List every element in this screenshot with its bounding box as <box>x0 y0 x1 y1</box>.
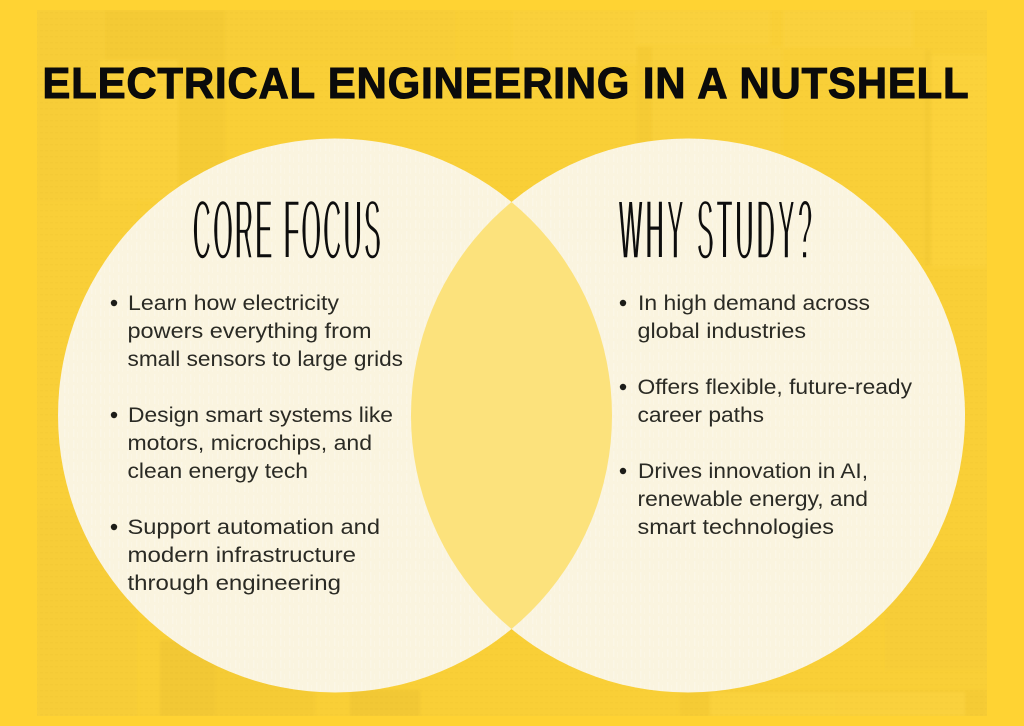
bullet: innovation: Drives innovation in AI, <box>638 459 868 483</box>
bullet: electricity: powers everything from <box>128 319 372 343</box>
headings <box>193 183 812 278</box>
heading: why study: WHY STUDY? <box>619 183 812 278</box>
bullet: electricity <box>111 291 403 371</box>
bullet: automation: through engineering <box>128 571 341 595</box>
title: ELECTRICAL ENGINEERING IN A NUTSHELL <box>42 60 970 108</box>
bullet: automation <box>111 515 380 595</box>
list: core focus <box>111 291 403 595</box>
bullet: demand: global industries <box>638 319 806 343</box>
bullet: innovation: smart technologies <box>638 515 834 539</box>
venn circle: core focus <box>58 138 612 692</box>
bullet: automation: Support automation and <box>128 515 380 539</box>
bullet: smart systems: motors, microchips, and <box>128 431 372 455</box>
bullet: innovation: renewable energy, and <box>638 487 868 511</box>
bullet: career paths <box>620 375 912 427</box>
bullet: smart systems: clean energy tech <box>128 459 308 483</box>
bullet: automation: modern infrastructure <box>128 543 356 567</box>
heading: core focus: CORE FOCUS <box>193 183 381 278</box>
bullet: career paths: Offers flexible, future-ready <box>638 375 912 399</box>
venn circle texture <box>58 138 965 692</box>
bullet: innovation <box>620 459 868 539</box>
bullet: smart systems <box>111 403 393 483</box>
venn overlap <box>411 202 612 629</box>
bullet: demand <box>620 291 870 343</box>
bullet: electricity: Learn how electricity <box>128 291 339 315</box>
bullet: career paths: career paths <box>638 403 764 427</box>
bullet: smart systems: Design smart systems like <box>128 403 393 427</box>
venn circle: why study <box>411 138 965 692</box>
list: why study <box>620 291 912 539</box>
bullet: demand: In high demand across <box>638 291 870 315</box>
bullet: electricity: small sensors to large grids <box>128 347 403 371</box>
